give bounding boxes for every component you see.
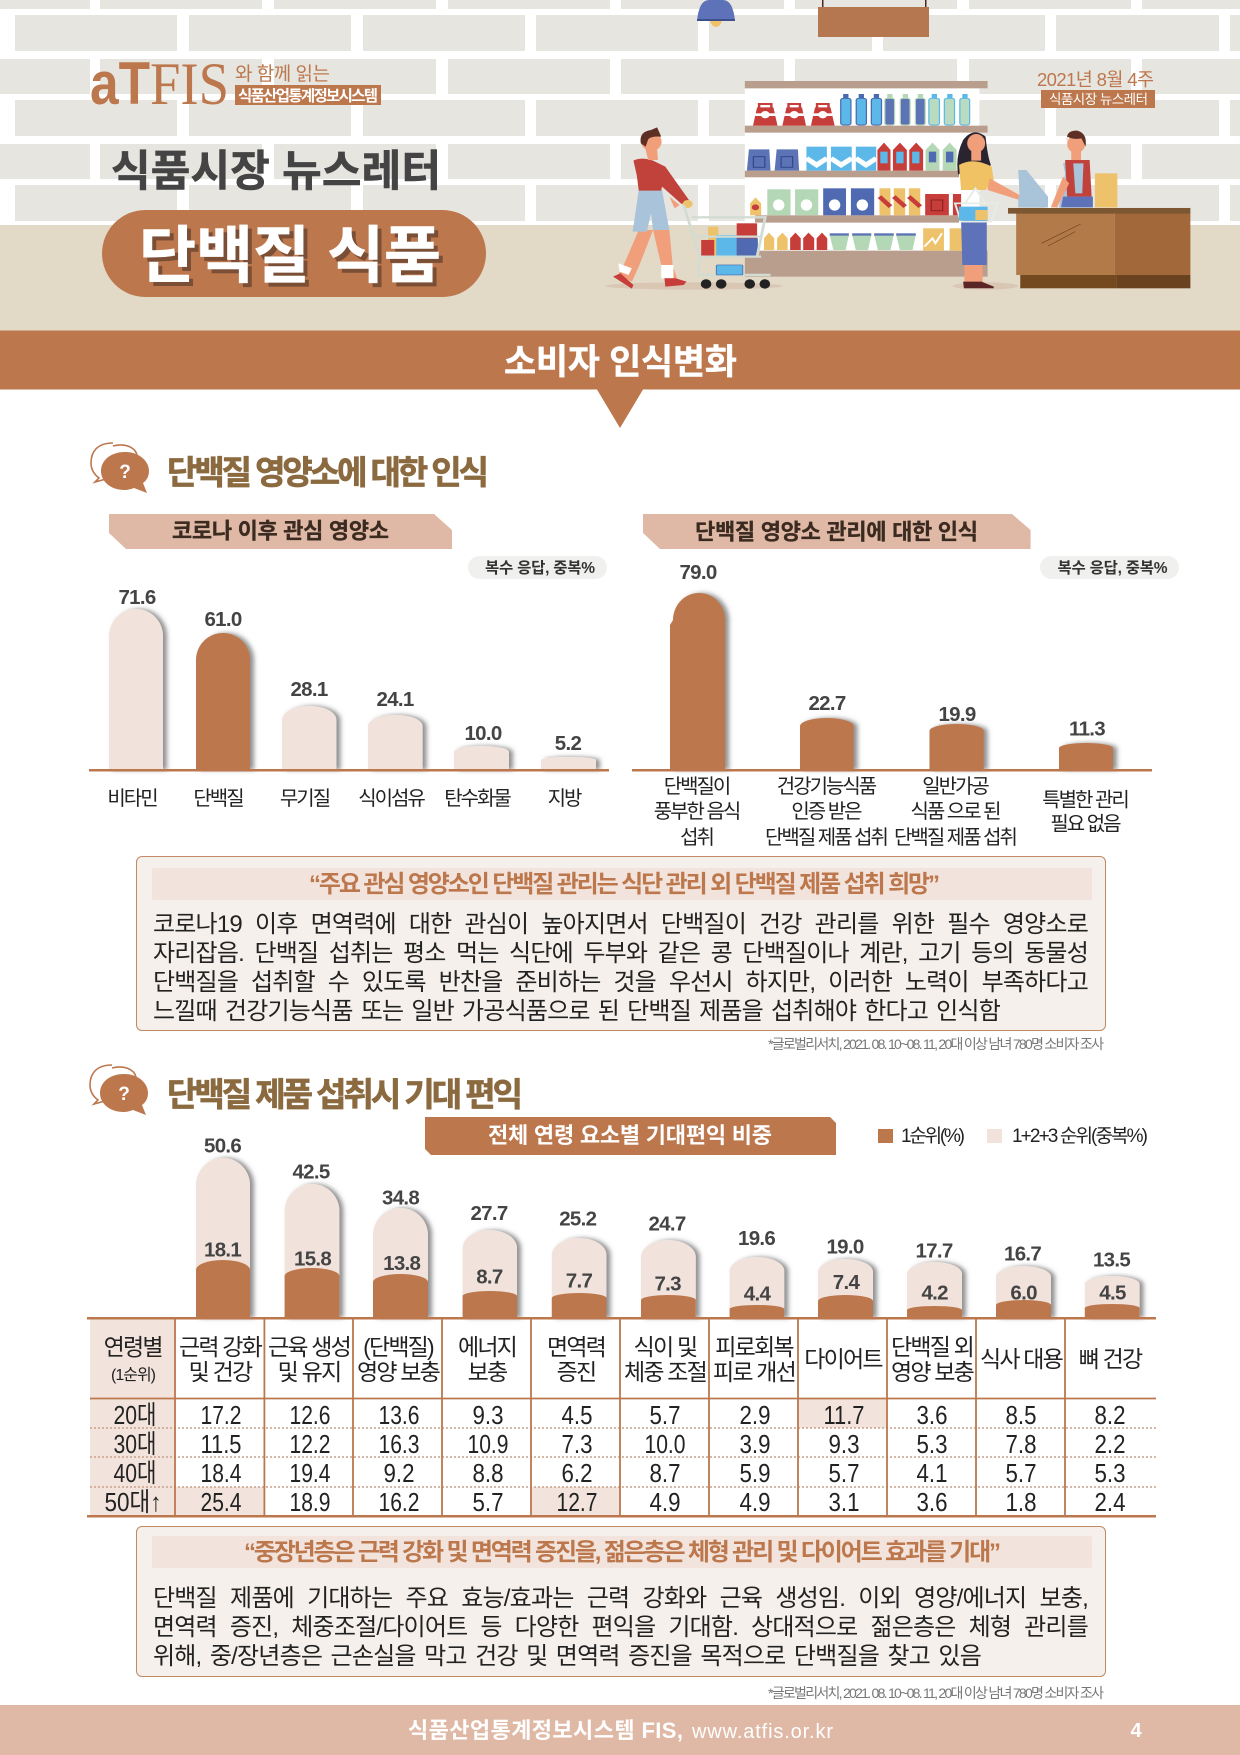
stacked bar chart: expected benefits: 7.3 — [654, 1273, 681, 1296]
table data rows: 5.7 — [1006, 1458, 1036, 1488]
table data rows: 25.4 — [200, 1487, 242, 1517]
table data rows: 7.3 — [562, 1429, 592, 1459]
table data rows: 5.9 — [740, 1458, 770, 1488]
bar chart: nutrients of interest: 단백질 — [193, 787, 243, 810]
bar chart: nutrients of interest: 10.0 — [464, 722, 502, 745]
callout 1 heading: “주요 관심 영양소인 단백질 관리는 식단 관리 외 단백질 제품 섭취 희망” — [309, 871, 940, 898]
stacked bar chart: expected benefits: 27.7 — [470, 1202, 508, 1225]
note pill: multiple response: 복수 응답, 중복% — [485, 559, 595, 577]
table data rows: 12.2 — [290, 1429, 330, 1459]
stacked bar chart: expected benefits: 13.8 — [383, 1252, 421, 1275]
table data rows: 8.7 — [650, 1458, 680, 1488]
table data rows: 2.9 — [740, 1400, 770, 1430]
note pill: multiple response — [468, 556, 607, 579]
table data rows: 12.7 — [556, 1487, 598, 1517]
bar chart: nutrients of interest — [89, 586, 609, 810]
table header row: 에너지 — [458, 1334, 516, 1360]
table data rows: 8.5 — [1006, 1400, 1036, 1430]
bar chart: protein management perception: 11.3 — [1069, 718, 1105, 740]
table header row: 영양 보충 — [891, 1359, 974, 1385]
illustration: grocery store — [605, 81, 1190, 290]
table data rows: 17.2 — [200, 1400, 242, 1430]
table data rows: 19.4 — [290, 1458, 330, 1488]
subheader: protein management perception: 단백질 영양소 관리에 대한 인식 — [695, 520, 978, 544]
icon: question bubble 2 — [90, 1065, 148, 1115]
source note 2: *글로벌리서치, 2021. 08. 10~08. 11, 20대 이상 남녀 780명 소비자 조사 — [768, 1685, 1104, 1701]
bar chart: protein management perception: 특별한 관리 — [1042, 788, 1128, 812]
table header row: 연령별 — [104, 1334, 162, 1360]
table: benefits by age — [87, 1317, 1156, 1518]
icon: question bubble 1 — [91, 443, 149, 493]
title pill: protein food: 단백질 식품 — [139, 222, 441, 291]
footer: www.atfis.or.kr — [691, 1721, 833, 1743]
bar chart: nutrients of interest: 탄수화물 — [444, 787, 511, 810]
bar chart: nutrients of interest: 24.1 — [376, 688, 414, 711]
title pill: protein food: 단백질 식품 — [143, 226, 445, 295]
bar chart: protein management perception: 건강기능식품 — [777, 775, 877, 798]
footer — [0, 1705, 1240, 1755]
bar chart: protein management perception: 일반가공 — [922, 775, 989, 798]
stacked bar chart: expected benefits: 16.7 — [1004, 1243, 1041, 1266]
logo: aT FIS: aT — [90, 50, 150, 117]
table data rows: 5.3 — [916, 1429, 948, 1459]
logo: aT FIS — [90, 50, 381, 117]
bar chart: protein management perception: 필요 없음 — [1050, 812, 1121, 836]
bar chart: nutrients of interest: 5.2 — [555, 732, 581, 755]
note pill: multiple response — [1040, 556, 1179, 579]
date label: 2021년 8월 4주 — [1037, 69, 1154, 90]
footer: 4 — [1130, 1720, 1142, 1742]
table data rows: 11.7 — [824, 1400, 864, 1430]
icon: question bubble 2: ? — [118, 1084, 130, 1105]
icon: hanging lamp — [697, 0, 735, 27]
table data rows: 3.9 — [740, 1429, 770, 1459]
bar chart: nutrients of interest: 비타민 — [107, 787, 157, 810]
logo: aT FIS: FIS — [150, 51, 229, 117]
callout 1 heading — [152, 868, 1092, 900]
bar chart: nutrients of interest: 71.6 — [118, 586, 156, 609]
bar chart: nutrients of interest: 28.1 — [290, 678, 328, 701]
legend — [878, 1125, 1148, 1147]
table data rows: 9.3 — [472, 1400, 504, 1430]
callout 2 text — [153, 1584, 1088, 1670]
stacked bar chart: expected benefits: 24.7 — [648, 1213, 686, 1236]
table data rows: 7.8 — [1006, 1429, 1036, 1459]
table data rows: 5.3 — [1094, 1458, 1126, 1488]
callout 1 text — [153, 910, 1088, 1025]
table data rows: 20대 — [114, 1400, 156, 1430]
panel: callout 2 — [136, 1526, 1106, 1677]
table data rows: 5.7 — [472, 1487, 504, 1517]
table data rows: 30대 — [114, 1429, 156, 1459]
table data rows: 3.6 — [916, 1400, 948, 1430]
bar chart: protein management perception: 인증 받은 — [791, 800, 862, 823]
table data rows: 4.9 — [740, 1487, 770, 1517]
callout 2 text: 단백질 제품에 기대하는 주요 효능/효과는 근력 강화와 근육 생성임. 이외 영양/에너지 보충, — [153, 1584, 1088, 1612]
table data rows: 10.9 — [468, 1429, 508, 1459]
bar chart: protein management perception: 풍부한 음식 — [654, 800, 739, 823]
panel: callout 1 — [136, 856, 1106, 1031]
callout 1 text: 단백질을 섭취할 수 있도록 반찬을 준비하는 것을 우선시 하지만, 이러한 노력이 부족하다고 — [153, 969, 1088, 996]
note pill: multiple response: 복수 응답, 중복% — [1058, 559, 1168, 577]
bar chart: nutrients of interest: 61.0 — [204, 608, 242, 631]
bar chart: protein management perception: 22.7 — [808, 692, 846, 715]
logo: aT FIS: 와 함께 읽는 — [235, 63, 330, 85]
table data rows: 16.3 — [378, 1429, 420, 1459]
stacked bar chart: expected benefits: 4.4 — [744, 1283, 771, 1306]
logo: aT FIS: 식품산업통계정보시스템 — [238, 87, 378, 105]
stacked bar chart: expected benefits: 19.0 — [826, 1235, 864, 1258]
icon: question bubble 1: ? — [119, 462, 131, 483]
table data rows: 11.5 — [200, 1429, 242, 1459]
table data rows: 9.3 — [828, 1429, 860, 1459]
callout 1 text: 자리잡음. 단백질 섭취는 평소 먹는 식단에 두부와 같은 콩 단백질이나 계란, 고기 등의 동물성 — [153, 940, 1088, 967]
table data rows: 3.6 — [916, 1487, 948, 1517]
heading: expected benefits: 단백질 제품 섭취시 기대 편익 — [167, 1076, 523, 1113]
source note 1: *글로벌리서치, 2021. 08. 10~08. 11, 20대 이상 남녀 780명 소비자 조사 — [768, 1036, 1104, 1052]
table header row: 단백질 외 — [891, 1334, 973, 1360]
bar chart: protein management perception: 식품 으로 된 — [910, 800, 1000, 823]
table header row: 영양 보충 — [357, 1359, 440, 1385]
table data rows: 8.8 — [472, 1458, 504, 1488]
table data rows: 2.4 — [1094, 1487, 1126, 1517]
table data rows — [104, 1400, 1126, 1517]
table header row: 면역력 — [547, 1334, 605, 1360]
stacked bar chart: expected benefits: 42.5 — [292, 1161, 330, 1184]
callout 2 text: 위해, 중/장년층은 근손실을 막고 건강 및 면역력 증진을 목적으로 단백질을 찾고 있음 — [153, 1643, 981, 1670]
stacked bar chart: expected benefits: 34.8 — [382, 1187, 419, 1210]
heading: nutrient perception: 단백질 영양소에 대한 인식 — [167, 454, 489, 491]
table header row: 식사 대용 — [980, 1346, 1063, 1372]
callout 2 heading: “중장년층은 근력 강화 및 면역력 증진을, 젊은층은 체형 관리 및 다이어트 효과를 기대” — [244, 1538, 1001, 1566]
table data rows: 5.7 — [828, 1458, 860, 1488]
subheader: nutrients of interest after covid — [109, 514, 452, 549]
bar chart: protein management perception: 단백질이 — [664, 775, 729, 798]
table data rows: 12.6 — [290, 1400, 330, 1430]
table header row: 식이 및 — [634, 1334, 697, 1360]
legend: 1+2+3 순위(중복%) — [1012, 1125, 1148, 1147]
bar chart: protein management perception: 단백질 제품 섭취 — [765, 826, 887, 849]
stacked bar chart: expected benefits: 4.2 — [921, 1282, 948, 1305]
table data rows: 18.9 — [290, 1487, 330, 1517]
bar chart: nutrients of interest: 식이섬유 — [358, 787, 425, 810]
bar chart: protein management perception: 섭취 — [680, 826, 713, 849]
table data rows: 16.2 — [378, 1487, 420, 1517]
table data rows: 18.4 — [200, 1458, 242, 1488]
stacked bar chart: expected benefits: 13.5 — [1093, 1248, 1130, 1271]
table data rows: 10.0 — [644, 1429, 686, 1459]
section banner: consumer perception change — [0, 330, 1240, 428]
title: newsletter: 식품시장 뉴스레터 — [111, 148, 441, 196]
table header row: 증진 — [557, 1359, 595, 1385]
table header row: 피로 개선 — [713, 1359, 795, 1385]
date label — [1037, 69, 1155, 108]
table header row: (1순위) — [111, 1366, 156, 1384]
table data rows: 4.5 — [562, 1400, 592, 1430]
stacked bar chart: expected benefits: 7.4 — [833, 1271, 860, 1294]
bar chart: nutrients of interest: 지방 — [548, 787, 582, 810]
stacked bar chart: expected benefits: 7.7 — [566, 1269, 592, 1292]
title pill: protein food — [102, 210, 486, 297]
table data rows: 6.2 — [562, 1458, 592, 1488]
table header row: 뼈 건강 — [1079, 1346, 1143, 1372]
table header row: 체중 조절 — [624, 1359, 707, 1385]
stacked bar chart: expected benefits: 25.2 — [559, 1208, 597, 1231]
stacked bar chart: expected benefits: 17.7 — [915, 1239, 953, 1262]
legend: 1순위(%) — [901, 1125, 965, 1147]
table data rows: 50대↑ — [104, 1487, 162, 1517]
callout 1 text: 코로나19 이후 면역력에 대한 관심이 높아지면서 단백질이 건강 관리를 위한 필수 영양소로 — [153, 910, 1088, 938]
date label: 식품시장 뉴스레터 — [1049, 92, 1148, 107]
table data rows: 4.9 — [650, 1487, 680, 1517]
bar chart: protein management perception — [632, 561, 1152, 849]
stacked bar chart: expected benefits: 4.5 — [1099, 1282, 1126, 1305]
stacked bar chart: expected benefits: 8.7 — [476, 1265, 503, 1288]
table data rows: 2.2 — [1094, 1429, 1126, 1459]
table header row — [104, 1334, 1143, 1385]
icon: hanging sign — [818, 0, 929, 37]
stacked bar chart: expected benefits: 15.8 — [294, 1248, 331, 1271]
stacked bar chart: expected benefits: 6.0 — [1010, 1282, 1037, 1305]
table data rows: 9.2 — [384, 1458, 414, 1488]
callout 2 heading — [152, 1536, 1092, 1568]
bar chart: protein management perception: 19.9 — [938, 703, 976, 726]
stacked bar chart: expected benefits — [196, 1134, 1140, 1318]
table header row: 및 유지 — [278, 1359, 340, 1385]
table data rows: 1.8 — [1006, 1487, 1036, 1517]
table header row: 및 건강 — [189, 1359, 253, 1385]
stacked bar chart: expected benefits: 18.1 — [204, 1238, 241, 1262]
table header row: (단백질) — [363, 1334, 434, 1360]
footer: 식품산업통계정보시스템 FIS, — [408, 1718, 683, 1743]
table data rows: 3.1 — [828, 1487, 860, 1517]
table header row: 근육 생성 — [268, 1334, 350, 1360]
table data rows: 8.2 — [1094, 1400, 1126, 1430]
bar chart: protein management perception: 단백질 제품 섭취 — [894, 826, 1016, 849]
table data rows: 13.6 — [378, 1400, 420, 1430]
subheader: expected benefit share — [425, 1117, 836, 1155]
callout 1 text: 느낄때 건강기능식품 또는 일반 가공식품으로 된 단백질 제품을 섭취해야 한다고 인식함 — [153, 998, 1000, 1025]
subheader: expected benefit share: 전체 연령 요소별 기대편익 비중 — [488, 1123, 772, 1148]
subheader: nutrients of interest after covid: 코로나 이후 관심 영양소 — [172, 518, 389, 544]
bar chart: protein management perception: 79.0 — [679, 561, 717, 584]
table header row: 근력 강화 — [179, 1334, 263, 1360]
table data rows: 4.1 — [916, 1458, 948, 1488]
stacked bar chart: expected benefits: 19.6 — [738, 1227, 775, 1250]
table header row: 피로회복 — [715, 1334, 793, 1360]
subheader: protein management perception — [643, 514, 1031, 549]
table header row: 다이어트 — [804, 1346, 882, 1372]
callout 2 text: 면역력 증진, 체중조절/다이어트 등 다양한 편익을 기대함. 상대적으로 젊은층은 체형 관리를 — [153, 1614, 1088, 1641]
table data rows: 40대 — [114, 1458, 156, 1488]
table header row: 보충 — [468, 1359, 507, 1385]
table data rows: 5.7 — [650, 1400, 680, 1430]
bar chart: nutrients of interest: 무기질 — [280, 787, 330, 810]
section banner: consumer perception change: 소비자 인식변화 — [504, 343, 737, 382]
stacked bar chart: expected benefits: 50.6 — [204, 1134, 241, 1158]
